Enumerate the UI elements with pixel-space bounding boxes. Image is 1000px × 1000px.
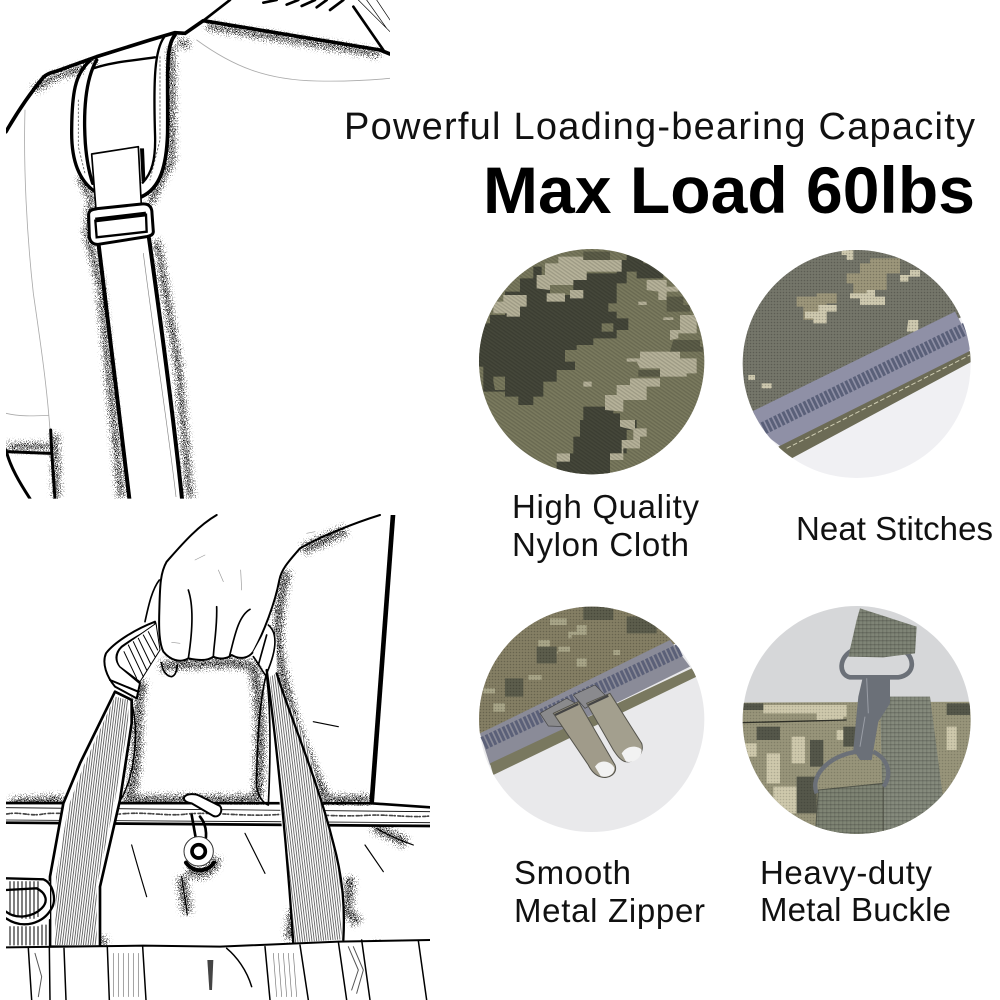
caption: zipper: Smooth bbox=[514, 854, 631, 891]
strap loop bbox=[72, 35, 175, 197]
right webbing strap bbox=[880, 697, 943, 840]
zipper pull bbox=[184, 794, 221, 870]
zipper pull left bbox=[540, 698, 616, 778]
caption: stitches: Neat Stitches bbox=[796, 510, 993, 547]
dark camo patches bbox=[478, 255, 663, 475]
zipper pull right bbox=[573, 685, 642, 762]
illustration: hand holding bag handles line drawing bbox=[6, 515, 430, 1000]
D-ring tab bbox=[6, 878, 54, 947]
camo edge bbox=[778, 350, 972, 458]
long strap edges bbox=[99, 238, 182, 499]
stippled shadows bbox=[10, 530, 407, 963]
right handle strap bbox=[253, 625, 344, 943]
tan camo patches bbox=[493, 257, 697, 462]
zipper teeth bbox=[483, 650, 680, 743]
lower webbing strap bbox=[815, 783, 883, 840]
lower bag band bbox=[6, 940, 430, 1000]
top webbing strap bbox=[848, 608, 917, 657]
snap hook bbox=[815, 675, 890, 793]
main heading: Max Load 60lbs bbox=[483, 153, 975, 227]
mid camo patches bbox=[583, 252, 703, 377]
caption: zipper: Metal Zipper bbox=[514, 892, 705, 929]
caption: buckle: Heavy-duty bbox=[760, 854, 932, 891]
body thin lines bbox=[6, 40, 390, 430]
caption: nylon cloth: Nylon Cloth bbox=[512, 526, 689, 563]
horizontal bag trim bbox=[6, 802, 430, 826]
bag folds bbox=[132, 722, 413, 915]
thick vertical line bbox=[369, 515, 395, 803]
strap keeper patch bbox=[90, 146, 142, 208]
zipper tape bbox=[752, 312, 972, 448]
arm lower lines bbox=[6, 430, 55, 499]
buckle bbox=[89, 204, 153, 244]
zipper teeth bbox=[763, 328, 967, 428]
detail circle: neat stitches bbox=[742, 250, 971, 478]
illustration: shoulder strap line drawing bbox=[6, 0, 390, 499]
collar detail bbox=[358, 0, 390, 32]
caption: buckle: Metal Buckle bbox=[760, 891, 951, 928]
caption: nylon cloth: High Quality bbox=[512, 488, 700, 525]
keeper shadow bbox=[140, 148, 145, 182]
left handle strap bbox=[50, 622, 160, 947]
olive speck in dark area bbox=[493, 323, 613, 390]
detail circle: buckle bbox=[737, 600, 977, 840]
D ring bbox=[842, 650, 912, 677]
stippled shadows bbox=[7, 26, 380, 499]
neck and collar bbox=[203, 0, 383, 50]
shoulder outline bbox=[6, 21, 390, 132]
zipper tape bbox=[480, 640, 690, 765]
detail circle: zipper bbox=[479, 606, 704, 832]
hand bbox=[145, 515, 380, 677]
subheading: Powerful Loading-bearing Capacity bbox=[344, 106, 975, 148]
strap inner stitching bbox=[143, 253, 176, 497]
camo edge bbox=[490, 668, 697, 775]
detail circle: nylon cloth bbox=[478, 249, 704, 474]
